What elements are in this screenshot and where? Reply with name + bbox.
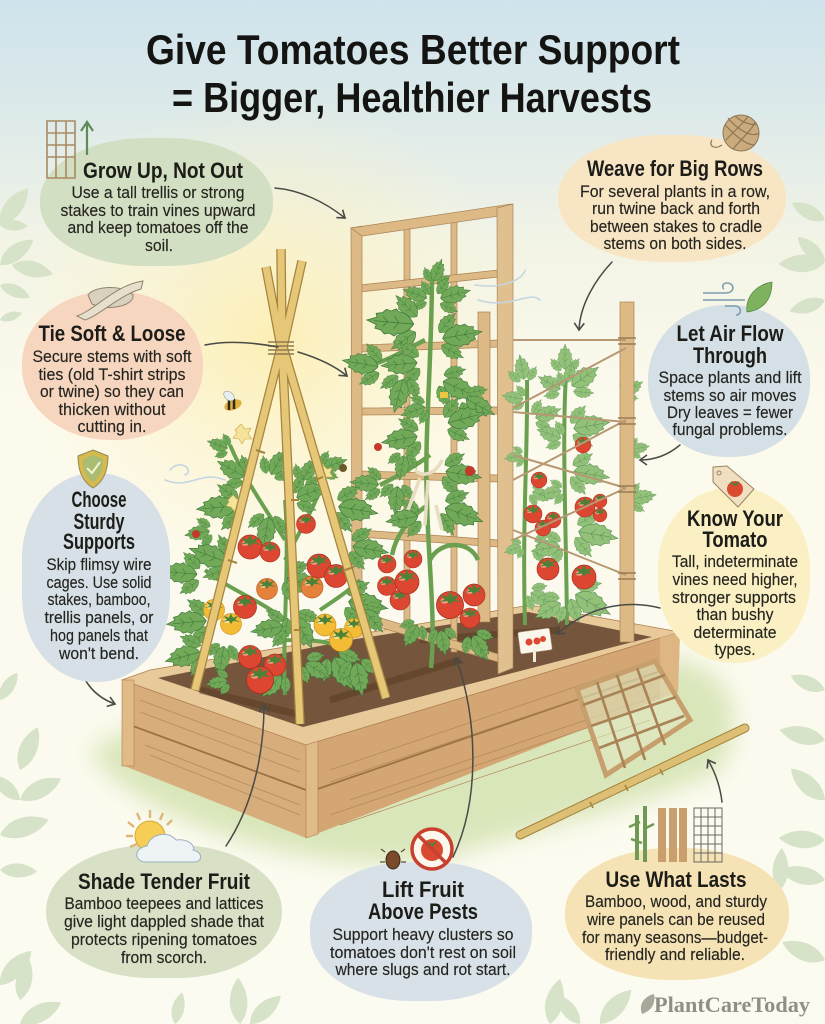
text: know your tomato: Tall, indeterminate [672, 553, 798, 571]
text: weave: stems on both sides. [604, 235, 746, 253]
text: let air: Let Air Flow [676, 321, 784, 346]
panel: let air flow through [648, 282, 810, 457]
text: tie soft: thicken without [58, 401, 166, 419]
text: shade: Shade Tender Fruit [78, 869, 251, 894]
icon: trellis with arrow [47, 121, 93, 178]
icon: sun and cloud [126, 810, 201, 862]
back stake [478, 312, 490, 622]
text: know your tomato: types. [714, 641, 756, 659]
arrow: grow up [275, 188, 345, 218]
arrow: tie soft [205, 342, 347, 376]
watermark: PlantCareToday [654, 992, 810, 1017]
text: tie soft: Tie Soft & Loose [38, 321, 186, 346]
text: use what lasts: Use What Lasts [606, 867, 746, 892]
text: choose sturdy: hog panels that [50, 627, 148, 645]
text: choose sturdy: won't bend. [58, 645, 139, 663]
text: grow up [60, 158, 256, 255]
text: lift: Support heavy clusters so [332, 926, 514, 944]
text: tie soft: Secure stems with soft [32, 348, 192, 366]
text: choose sturdy [44, 487, 154, 663]
arrow: lift fruit [453, 658, 473, 857]
text: choose sturdy: cages. Use solid [46, 574, 152, 592]
panel: use what lasts [565, 806, 789, 980]
right tomato plants [499, 344, 660, 639]
text: lift [330, 877, 516, 979]
text: grow up: Use a tall trellis or strong [72, 184, 244, 202]
title: Give Tomatoes Better Support [146, 26, 680, 73]
insects [192, 389, 475, 538]
icon: seed tag [713, 466, 754, 507]
text: use what lasts: wire panels can be reused [586, 911, 765, 929]
text: let air: fungal problems. [672, 421, 788, 439]
text: know your tomato: stronger supports [672, 589, 796, 607]
twine stake and weave [513, 302, 636, 642]
arrow: shade [226, 705, 264, 846]
arrow: sturdy supports [78, 662, 115, 704]
text: know your tomato: Know Your [687, 506, 783, 531]
title [146, 26, 680, 121]
panel: shade tender fruit [46, 810, 282, 978]
icon: bamboo, wood and wire [629, 806, 722, 862]
text: choose sturdy: Skip flimsy wire [46, 556, 152, 574]
text: use what lasts: Bamboo, wood, and sturdy [585, 893, 768, 911]
title: = Bigger, Healthier Harvests [172, 74, 652, 121]
text: tie soft: cutting in. [78, 418, 146, 436]
panel: tie soft and loose [22, 281, 203, 440]
text: choose sturdy: stakes, bamboo, [48, 591, 150, 609]
panel: know your tomato [658, 466, 810, 663]
text: know your tomato [672, 506, 798, 659]
text: grow up: soil. [145, 237, 173, 255]
text: choose sturdy: Choose [72, 487, 126, 512]
text: use what lasts: for many seasons—budget- [582, 929, 768, 947]
icon: wind and leaf [703, 282, 772, 315]
panel: choose sturdy supports [22, 450, 170, 682]
text: lift: Above Pests [368, 899, 478, 924]
text: know your tomato: than bushy [696, 606, 774, 624]
text: weave [580, 156, 770, 253]
text: shade: give light dappled shade that [64, 913, 264, 931]
text: know your tomato: determinate [694, 624, 776, 642]
text: shade [64, 869, 264, 967]
text: grow up: Grow Up, Not Out [83, 158, 244, 183]
text: shade: protects ripening tomatoes [71, 931, 257, 949]
panel: lift fruit above pests [310, 829, 532, 1001]
text: choose sturdy: Sturdy [74, 509, 125, 534]
arrow: know your tomato [557, 604, 660, 634]
text: let air: stems so air moves [664, 387, 796, 405]
grass around the bed [90, 660, 734, 863]
panel: weave for big rows [558, 115, 786, 262]
text: weave: between stakes to cradle [590, 218, 762, 236]
arrow: air flow [640, 445, 680, 460]
arrow: weave [579, 262, 612, 330]
text: lift: Lift Fruit [382, 877, 465, 902]
panel: grow up, not out [40, 121, 273, 266]
text: lift: tomatoes don't rest on soil [330, 944, 516, 962]
text: let air: Dry leaves = fewer [667, 404, 793, 422]
icon: beetle and no-tomato sign [380, 829, 452, 869]
text: weave: For several plants in a row, [580, 183, 770, 201]
left tomato plant [159, 424, 398, 710]
text: shade: Bamboo teepees and lattices [64, 895, 264, 913]
centre tomato plant [338, 253, 506, 671]
loose bamboo stake [520, 728, 745, 835]
text: let air: Through [693, 343, 767, 368]
plant label [518, 628, 552, 662]
wind swirls [165, 270, 540, 483]
text: weave: run twine back and forth [592, 200, 760, 218]
leaning trellis panel [577, 661, 690, 775]
text: grow up: stakes to train vines upward [60, 202, 256, 220]
text: lift: where slugs and rot start. [335, 961, 510, 979]
text: use what lasts [582, 867, 768, 964]
text: know your tomato: vines need higher, [672, 571, 798, 589]
text: tie soft: ties (old T-shirt strips [38, 366, 186, 384]
arrow: use what lasts [708, 760, 722, 802]
text: let air: Space plants and lift [658, 369, 802, 387]
text: choose sturdy: Supports [63, 529, 135, 554]
text: tie soft: or twine) so they can [40, 383, 184, 401]
text: tie soft [32, 321, 192, 436]
text: choose sturdy: trellis panels, or [44, 609, 154, 627]
trellis panel [351, 204, 513, 674]
text: weave: Weave for Big Rows [587, 156, 763, 181]
icon: fabric tie [77, 281, 143, 320]
text: use what lasts: friendly and reliable. [605, 946, 745, 964]
bamboo teepee [195, 249, 386, 724]
text: know your tomato: Tomato [702, 527, 768, 552]
text: let air [658, 321, 802, 439]
text: grow up: and keep tomatoes off the [68, 219, 248, 237]
text: shade: from scorch. [121, 949, 207, 967]
icon: shield with check [78, 450, 108, 488]
icon: ball of twine [711, 115, 759, 151]
raised garden bed [122, 605, 680, 838]
